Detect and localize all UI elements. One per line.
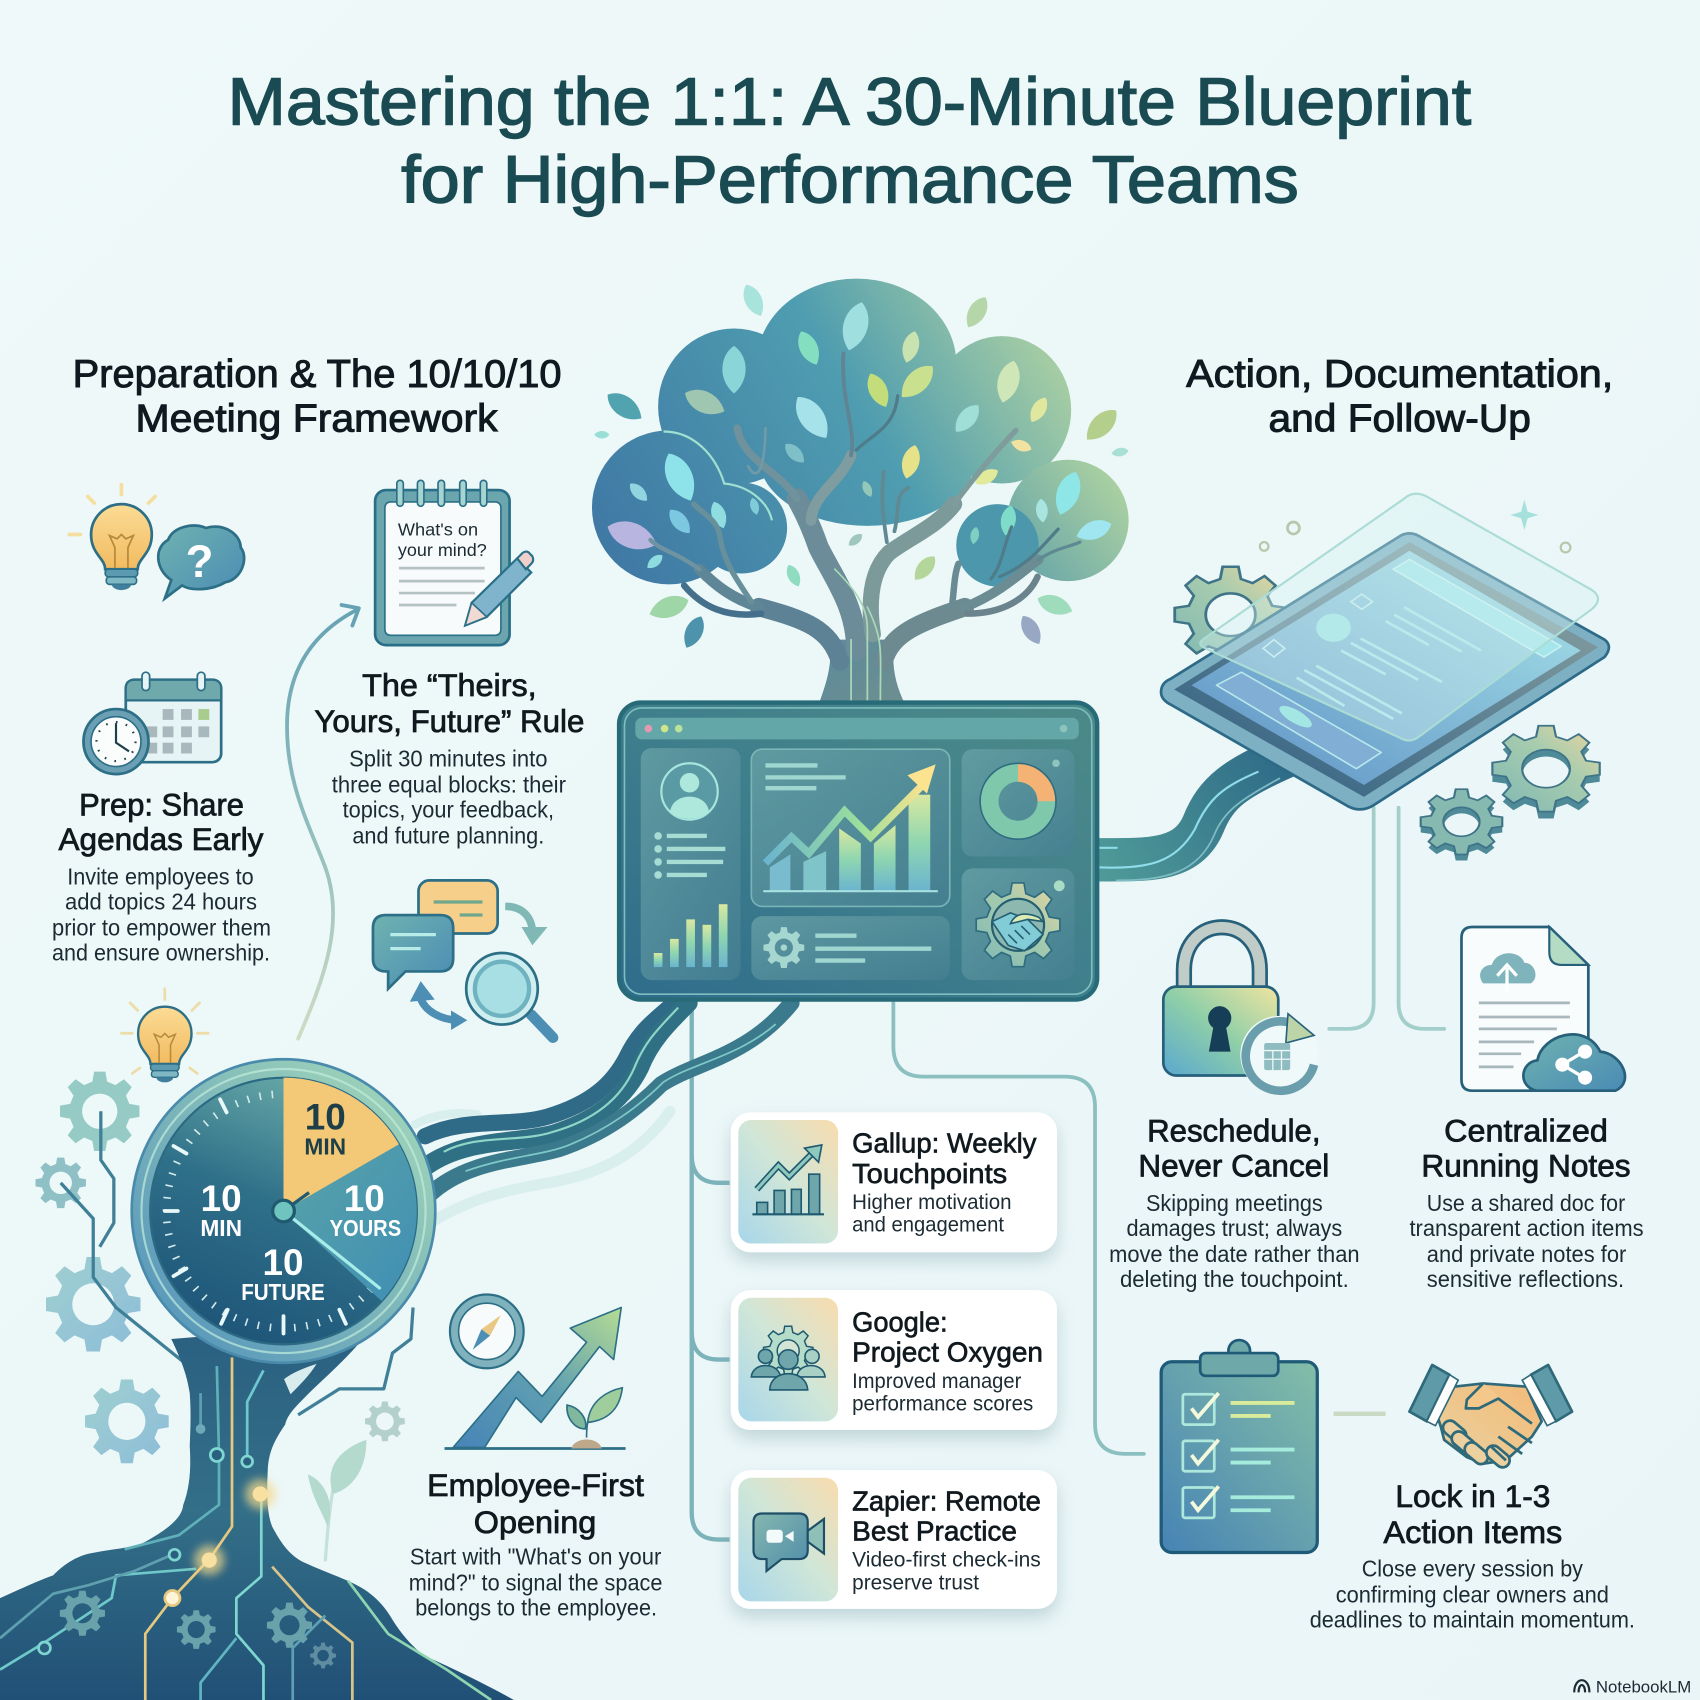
card icon: team and gear <box>738 1298 838 1421</box>
card text: zapier <box>852 1484 1041 1594</box>
heading: prep: Agendas Early <box>59 822 264 857</box>
clock label: 10 future <box>241 1242 325 1305</box>
connector lines: dashboard to cards <box>692 1003 730 1540</box>
card text: zapier: Video-first check-ins <box>852 1549 1041 1572</box>
clock segment: theirs <box>284 1078 399 1211</box>
card text: google: performance scores <box>852 1393 1033 1416</box>
card text: gallup <box>852 1126 1037 1237</box>
icon: compass and growth arrow <box>445 1295 626 1448</box>
tablet body <box>1161 533 1609 809</box>
title: for High-Performance Teams <box>401 143 1299 218</box>
growth arrow <box>453 1308 621 1447</box>
icon: chat bubbles and magnifier <box>373 880 553 1038</box>
clock label: 10 min top: MIN <box>304 1134 346 1160</box>
icon: lock and reschedule <box>1163 927 1318 1094</box>
heading: opening: Employee-First <box>427 1468 644 1503</box>
icon: bulb above clock <box>121 989 208 1082</box>
section heading: action: and Follow-Up <box>1268 398 1531 441</box>
body: reschedule: Skipping meetings <box>1146 1190 1323 1216</box>
card text: gallup: Touchpoints <box>852 1157 1007 1189</box>
compass <box>450 1295 524 1368</box>
card text: google: Project Oxygen <box>852 1336 1043 1368</box>
tablet screen <box>1192 551 1581 785</box>
card text: zapier: Best Practice <box>852 1515 1017 1547</box>
heading: reschedule: Reschedule, <box>1147 1114 1321 1149</box>
trunk and branches <box>651 353 1080 705</box>
clock label: 10 future: 10 <box>262 1242 303 1283</box>
body: notes: Use a shared doc for <box>1427 1190 1626 1216</box>
card text: zapier: Zapier: Remote <box>852 1484 1041 1516</box>
panel: dashboard <box>619 703 1097 1000</box>
heading: opening <box>427 1468 644 1540</box>
trunk gap <box>284 1364 317 1394</box>
clock label: 10 future: FUTURE <box>241 1279 325 1305</box>
body: action items: confirming clear owners and <box>1336 1581 1609 1607</box>
icon: document and cloud <box>1461 927 1625 1091</box>
body: opening: mind?" to signal the space <box>409 1569 662 1595</box>
heading: action items <box>1383 1479 1562 1550</box>
body: opening: Start with "What's on your <box>410 1543 662 1569</box>
text: centralized running notes <box>1409 1114 1644 1292</box>
heading: reschedule <box>1138 1114 1329 1183</box>
glass layer <box>1200 494 1598 740</box>
text: theirs yours future rule <box>314 668 584 848</box>
body: reschedule: deleting the touchpoint. <box>1120 1266 1349 1292</box>
clock segment: yours <box>284 1144 417 1301</box>
canopy leaves <box>594 281 1129 651</box>
body: notes <box>1409 1190 1644 1292</box>
heading: notes: Running Notes <box>1421 1148 1631 1183</box>
settings panel <box>751 916 950 980</box>
card: google <box>731 1290 1057 1430</box>
card icon: growth chart <box>738 1120 838 1244</box>
connector lines: tablet to lock and notes <box>1329 808 1444 1029</box>
icon: pencil <box>465 552 533 626</box>
heading: rule: Yours, Future” Rule <box>314 704 584 739</box>
donut panel <box>962 749 1074 857</box>
body: rule: three equal blocks: their <box>332 772 566 798</box>
card text: gallup: and engagement <box>852 1214 1004 1237</box>
heading: opening: Opening <box>474 1505 596 1540</box>
text: reschedule never cancel <box>1109 1114 1360 1292</box>
body: opening: belongs to the employee. <box>415 1594 657 1620</box>
clock label: 10 min left: 10 <box>201 1178 242 1219</box>
side gears <box>1421 726 1600 861</box>
clock label: 10 min left: MIN <box>200 1215 242 1241</box>
section heading: action <box>1186 353 1613 441</box>
card: gallup <box>731 1112 1057 1252</box>
body: rule: topics, your feedback, <box>343 796 554 822</box>
heading: notes <box>1421 1114 1631 1183</box>
text: employee-first opening <box>409 1468 662 1620</box>
body: notes: and private notes for <box>1427 1241 1627 1267</box>
card icon: video call <box>738 1478 838 1601</box>
connector line: dashboard to clipboard <box>893 1003 1144 1454</box>
body: action items: Close every session by <box>1362 1555 1583 1581</box>
question cloud <box>158 526 244 598</box>
body: notes: sensitive reflections. <box>1427 1266 1624 1292</box>
heading: reschedule: Never Cancel <box>1138 1148 1329 1183</box>
tree canopy <box>592 279 1129 587</box>
clock label: 10 min top: 10 <box>305 1097 346 1138</box>
chart: 30 minute clock <box>132 1059 435 1363</box>
chart panel <box>751 749 950 906</box>
card text: gallup: Higher motivation <box>852 1191 1012 1214</box>
clock label: 10 min left <box>200 1178 242 1241</box>
section heading: preparation <box>73 353 562 441</box>
section heading: action: Action, Documentation, <box>1186 353 1613 396</box>
watermark: NotebookLM: NotebookLM <box>1596 1677 1691 1696</box>
body: notes: transparent action items <box>1409 1215 1644 1241</box>
body: prep: and ensure ownership. <box>52 940 270 966</box>
sparkles <box>1260 500 1570 552</box>
card: zapier <box>731 1470 1057 1609</box>
body: reschedule: damages trust; always <box>1126 1215 1342 1241</box>
sprout <box>308 1440 366 1561</box>
icon: notepad: What's on <box>398 520 478 540</box>
clock label: 10 yours: 10 <box>344 1178 385 1219</box>
light bulb <box>69 485 155 590</box>
body: rule: Split 30 minutes into <box>349 746 548 772</box>
title: Mastering the 1:1: A 30-Minute Blueprint <box>228 65 1472 140</box>
title <box>228 65 1472 218</box>
clock label: 10 min top <box>304 1097 346 1160</box>
handshake gear panel <box>962 868 1074 980</box>
body: prep: Invite employees to <box>67 864 254 890</box>
back gear <box>1175 567 1286 663</box>
section heading: preparation: Meeting Framework <box>136 398 498 441</box>
heading: action items: Action Items <box>1383 1515 1562 1550</box>
heading: rule <box>314 668 584 739</box>
body: action items: deadlines to maintain momentum. <box>1310 1606 1635 1632</box>
clock label: 10 yours: YOURS <box>330 1215 401 1241</box>
gear circuit lines <box>61 1111 413 1415</box>
body: action items <box>1310 1555 1635 1632</box>
heading: prep <box>59 787 264 857</box>
tablet ribbon connector <box>1098 757 1285 880</box>
section heading: preparation: Preparation & The 10/10/10 <box>73 353 562 396</box>
card text: gallup: Gallup: Weekly <box>852 1126 1037 1158</box>
heading: notes: Centralized <box>1444 1114 1608 1149</box>
root shape <box>0 1323 514 1700</box>
body: reschedule <box>1109 1190 1360 1292</box>
heading: rule: The “Theirs, <box>362 668 537 703</box>
circuit lines <box>0 1357 491 1700</box>
card text: zapier: preserve trust <box>852 1571 979 1594</box>
side gears <box>35 1072 405 1463</box>
text: prep share agendas <box>52 787 271 966</box>
icon: notepad: your mind? <box>398 540 487 560</box>
seedling <box>567 1388 622 1448</box>
heading: action items: Lock in 1-3 <box>1395 1479 1550 1514</box>
window bar <box>635 718 1079 739</box>
icon: calendar and clock <box>83 672 221 774</box>
icon: bulb and question cloud <box>69 485 244 598</box>
arrow: clock up to notepad <box>287 605 359 1039</box>
icon: clipboard checklist <box>1161 1340 1317 1553</box>
heading: prep: Prep: Share <box>79 787 244 822</box>
body: prep <box>52 864 271 966</box>
clock label: 10 yours <box>330 1178 401 1241</box>
illustration: roots and gears <box>0 1072 514 1700</box>
body: prep: add topics 24 hours <box>65 889 257 915</box>
body: rule <box>332 746 566 848</box>
card text: google: Improved manager <box>852 1370 1021 1393</box>
text: lock in action items <box>1310 1479 1635 1632</box>
icon: notepad <box>375 480 533 645</box>
card text: google: Google: <box>852 1305 948 1337</box>
illustration: tablet and gears <box>1161 494 1609 861</box>
profile panel <box>641 748 740 980</box>
card text: google <box>852 1305 1043 1416</box>
body: reschedule: move the date rather than <box>1109 1241 1360 1267</box>
body: opening <box>409 1543 662 1620</box>
body: rule: and future planning. <box>352 822 544 848</box>
icon: handshake <box>1409 1365 1572 1470</box>
divider: clipboard to handshake <box>1334 1412 1386 1416</box>
illustration: tree <box>592 279 1129 705</box>
ribbon: clock to dashboard <box>415 1003 791 1227</box>
body: prep: prior to empower them <box>52 915 271 941</box>
root gears <box>60 1591 336 1668</box>
question cloud: ? <box>186 536 213 587</box>
circuit nodes <box>38 1424 275 1654</box>
